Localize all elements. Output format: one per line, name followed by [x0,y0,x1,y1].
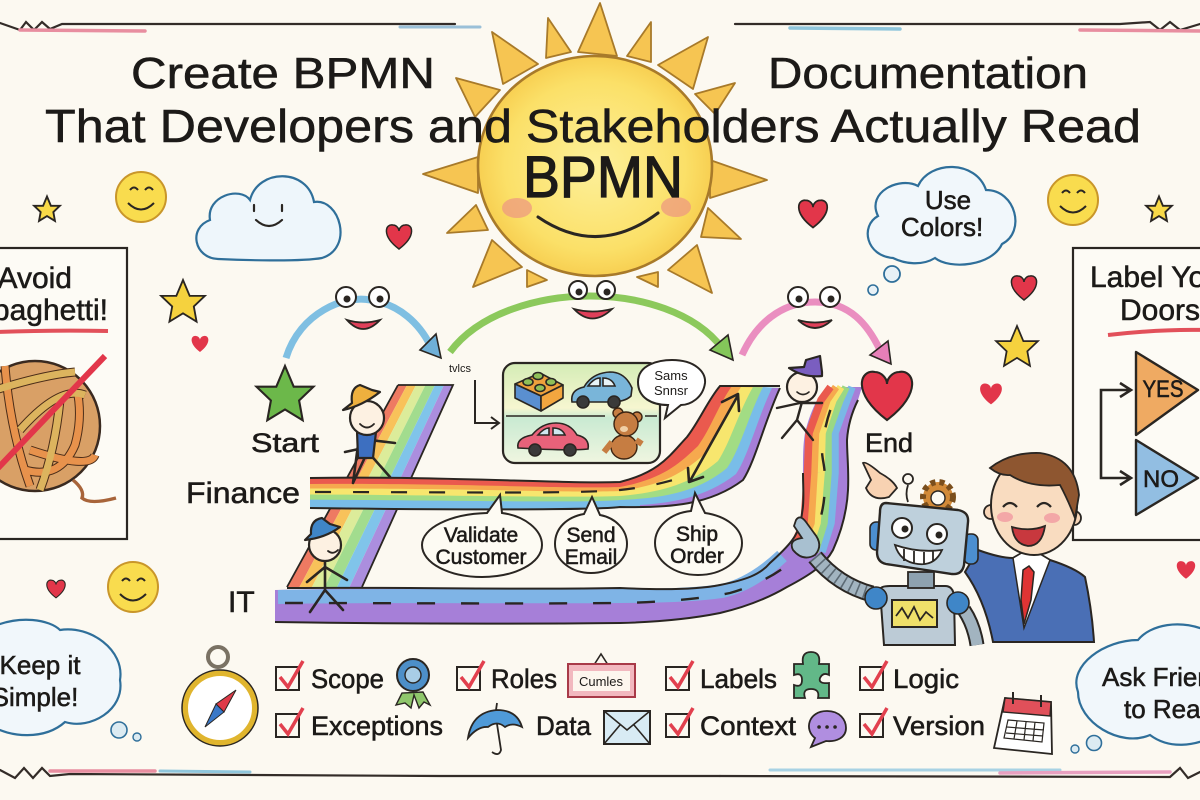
thought cloud: use colors [868,167,1015,295]
diagonal rainbow road [287,385,453,587]
panel: label your doors: Doors [1120,294,1200,327]
thought cloud: ask friend to read [1071,624,1200,753]
item: roles [457,661,557,694]
it label: IT [228,586,255,619]
shirt and tie [1013,548,1050,628]
no triangle: NO [1143,466,1179,493]
end label: End [865,428,913,458]
item: logic [860,661,959,694]
task bubble: send email: Email [565,546,617,569]
pointing hand [863,463,897,498]
sun cheeks [502,197,691,218]
icon: sign [568,654,635,697]
speech bubble [638,360,705,418]
robot [792,474,978,645]
blue car [572,372,632,408]
item: data: Data [536,711,592,741]
teddy bear [604,408,642,459]
red car [518,423,588,456]
item: version [860,708,985,741]
heart lower left [47,580,65,598]
cloud with face [196,176,341,260]
icon: compass [182,647,258,746]
thought cloud: keep it simple [0,620,141,741]
icon: yarn ball crossed out [0,356,116,502]
walker on diagonal [343,385,395,483]
thought cloud: use colors: Colors! [901,212,983,242]
walker lower left [305,518,347,612]
icon: calendar [994,692,1052,754]
start label: Start [251,428,320,458]
star top left [34,196,60,221]
it lane dashes [285,403,833,603]
sequence arrow green with face [450,281,733,360]
task bubble: ship order: Ship [676,523,718,546]
icon: ribbon [396,659,430,708]
sun rays [423,3,767,293]
panel: avoid spaghetti [0,248,127,539]
robot eyes [892,518,947,544]
star top right [1146,196,1172,221]
task bubble: validate customer: Validate [444,524,518,547]
icon: sign: Cumles [579,674,624,689]
sun label: BPMN [523,145,683,210]
task bubble: ship order [655,493,742,575]
task bubble: send email [555,497,627,573]
robot arm [815,557,872,594]
it lane edges [275,400,858,624]
title: Documentation [768,49,1088,98]
robot grin [895,545,942,564]
robot body [880,586,955,645]
gear [923,482,953,512]
smiley top right [1048,175,1098,225]
bottom sketched border [0,768,1200,778]
icon: envelope [604,711,650,744]
title: Create BPMN [131,49,435,98]
swimlane detail box [449,360,705,463]
item: logic: Logic [893,664,959,694]
toy box [503,363,660,463]
finance lane edges [310,386,780,509]
item: roles: Roles [491,664,557,694]
yes triangle: YES [1142,376,1184,403]
robot ears [870,522,978,564]
checklist [276,652,1052,754]
item: labels: Labels [700,664,777,694]
robot shoulders [865,587,969,614]
finance label: Finance [186,477,300,510]
yes triangle [1136,352,1198,435]
heart right of sun [799,200,827,228]
man in suit [863,453,1094,642]
item: version: Version [893,711,985,741]
star right [996,326,1038,366]
heart far right [1177,561,1195,579]
robot hand [792,517,819,558]
panel: label your doors [1073,248,1200,540]
heart small right [1011,276,1037,300]
item: context [666,708,797,741]
icon: chat bubble [809,711,846,747]
robot head [877,503,968,574]
end heart [862,372,912,420]
sun smile [538,213,658,237]
sequence arrow pink with face [742,287,891,364]
start star [256,366,314,420]
icon: umbrella [468,703,522,754]
task bubble: validate customer: Customer [435,546,527,569]
walker upper right [777,356,822,440]
right arm [964,610,977,645]
small label: tvlcs [449,363,472,375]
finance lane dashes [315,478,680,492]
item: scope: Scope [311,664,384,694]
speech bubble: Snnsr [654,383,689,398]
lego brick [515,372,563,411]
top sketched border [0,22,1200,31]
small heart left [192,336,208,352]
smiley top left [116,172,166,222]
suit [965,548,1094,642]
robot neck [908,572,934,588]
finance lane [310,386,780,509]
eyes [1003,503,1051,507]
item: scope [276,661,384,694]
hair [990,453,1079,518]
no triangle [1136,440,1198,515]
screen on robot chest [892,600,937,627]
cheeks [997,512,1060,523]
task bubble: ship order: Order [670,545,724,568]
title [45,49,1141,152]
smiley lower left [108,562,158,612]
connector arrow into box [475,380,499,429]
task bubble: validate customer [422,495,542,577]
robot antenna [903,474,913,502]
item: context: Context [700,711,797,741]
star yellow left [161,280,205,322]
thought cloud: use colors: Use [925,185,971,215]
double arrow on road [688,394,739,482]
sun disc [478,56,712,276]
task bubble: send email: Send [566,524,616,547]
item: exceptions: Exceptions [311,711,443,741]
icon: puzzle [794,652,829,698]
thought cloud: keep it simple: Keep it [0,650,81,680]
decision connector arrows [1101,383,1131,485]
sequence arrow blue with face [286,287,441,358]
speech bubble: Sams [654,368,688,383]
heart near cloud [386,225,412,249]
title: That Developers and Stakeholders Actually Read [45,100,1141,152]
rainbow roads [275,385,862,624]
ears [984,505,1081,525]
item: labels [666,661,777,694]
head [991,455,1077,555]
it lane [275,387,862,624]
heart lower right [980,383,1002,404]
laughing mouth [1012,526,1045,546]
sun [423,3,767,293]
